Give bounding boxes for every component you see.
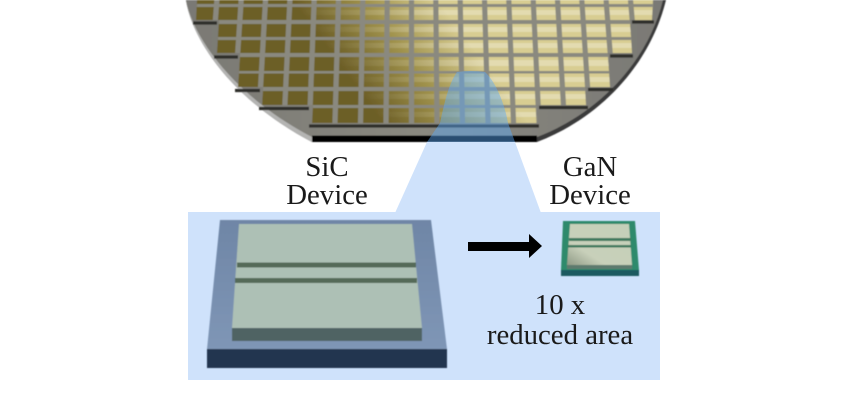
GaN device illustration [561,221,639,276]
label: GaN Device: GaN [563,151,617,183]
label: GaN Device: Device [549,179,631,211]
wafer surface [186,0,663,137]
vertical gutters [207,0,641,125]
caption: 10 x reduced area: 10 x [535,289,586,321]
panel: device comparison [188,212,660,380]
SiC substrate front [207,349,447,368]
SiC chip top [232,224,422,328]
magnification beam over wafer [427,71,515,142]
GaN chip slots [568,238,631,248]
wafer flat edge [312,136,537,142]
GaN chip front [567,265,632,269]
wafer left rim highlight [186,0,330,142]
wafer with gold dies [186,0,666,142]
die highlights [322,10,653,118]
SiC substrate top [207,220,447,349]
label: GaN Device [549,151,631,211]
GaN substrate top [561,221,639,270]
arrow [468,234,542,258]
SiC device illustration [207,220,447,368]
label: SiC Device: SiC [305,151,349,183]
label: SiC Device [286,151,368,211]
die grid [190,0,660,125]
caption: 10 x reduced area [487,289,633,351]
label: SiC Device: Device [286,179,368,211]
GaN chip top [567,224,632,265]
wafer rim [186,0,666,142]
caption: 10 x reduced area: reduced area [487,319,633,351]
die edge shadows [193,22,654,126]
magnification beam below wafer [395,142,541,213]
figure: wafer and device size comparison [185,0,666,380]
GaN substrate front [561,270,639,276]
SiC chip slots [235,262,417,283]
SiC chip front [232,328,422,341]
horizontal gutters [190,4,660,108]
